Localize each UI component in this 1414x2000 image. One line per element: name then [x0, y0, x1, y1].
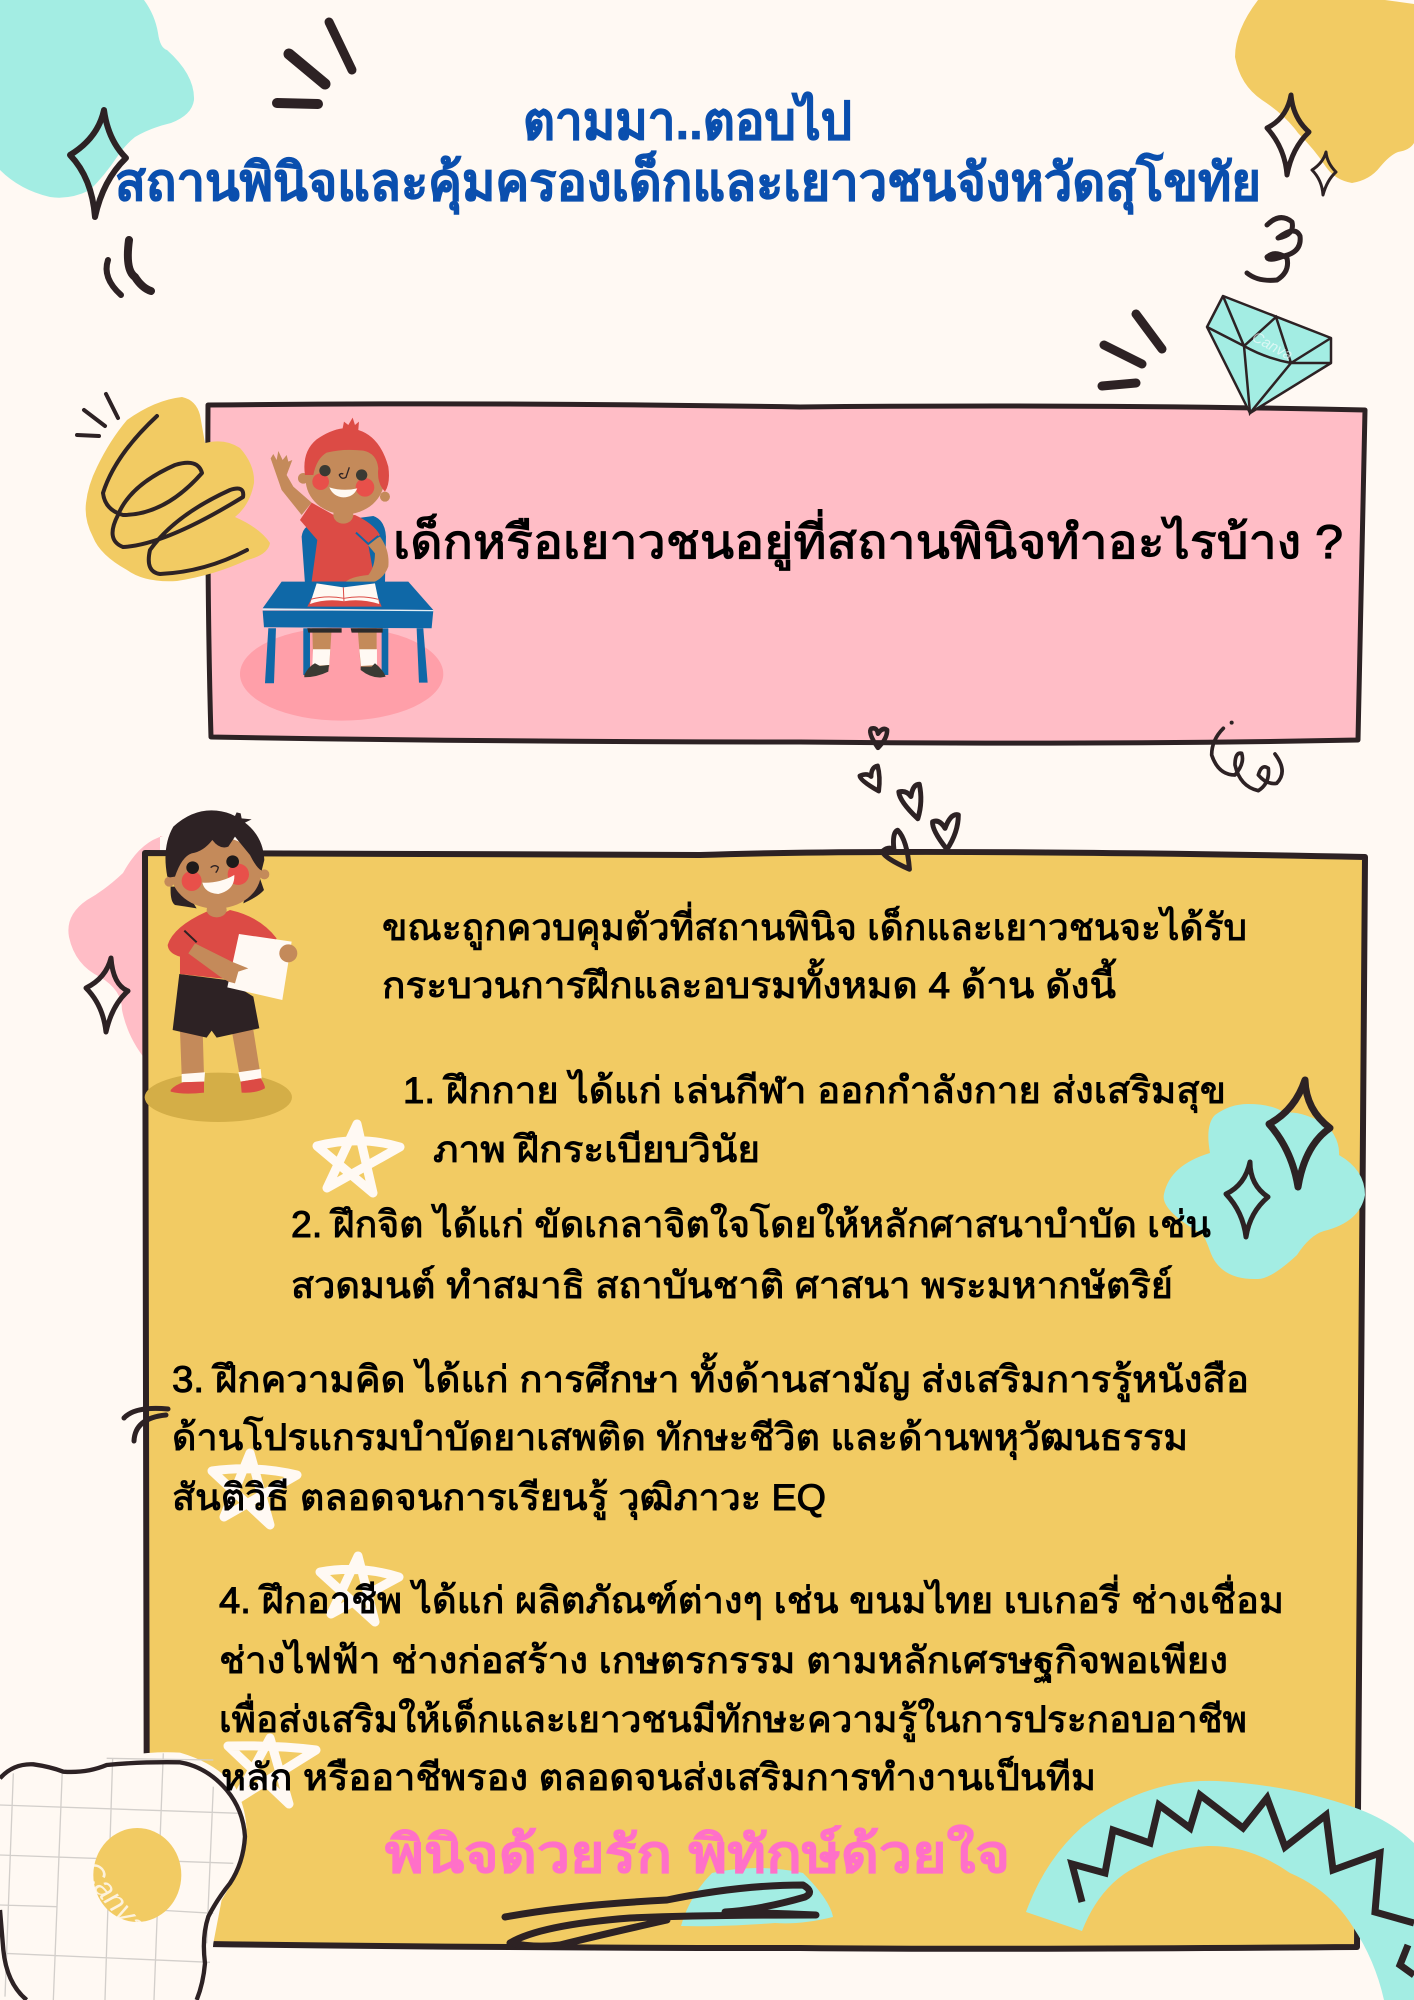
head	[298, 418, 390, 524]
head	[164, 810, 269, 917]
text block: item 3: สันติวิธี ตลอดจนการเรียนรู้ วุฒิภาวะ EQ	[172, 1477, 826, 1520]
text block: item 3: 3. ฝึกความคิด ได้แก่ การศึกษา ทั้งด้านสามัญ ส่งเสริมการรู้หนังสือ	[172, 1352, 1249, 1402]
decoration: double curved marks	[107, 240, 151, 295]
legs and shoes	[304, 628, 386, 677]
text block: item 4: 4. ฝึกอาชีพ ได้แก่ ผลิตภัณฑ์ต่างๆ เช่น ขนมไทย เบเกอรี่ ช่างเชื่อม	[219, 1574, 1284, 1621]
blob: small teal bottom centre	[681, 1868, 833, 1926]
yellow circle	[93, 1828, 181, 1922]
icon: diamond	[1207, 296, 1331, 413]
decoration: curly loop	[1212, 721, 1282, 791]
other arm	[345, 537, 389, 583]
raised arm	[271, 451, 312, 515]
text block: intro: ขณะถูกควบคุมตัวที่สถานพินิจ เด็กและเยาวชนจะได้รับ	[382, 901, 1247, 950]
panel: yellow details	[145, 852, 1365, 1949]
blob: yellow top right	[1235, 0, 1414, 183]
icon: white star 1	[317, 1124, 400, 1193]
panel: pink question	[208, 404, 1365, 743]
grid lines	[0, 1753, 240, 2000]
zigzag line	[1072, 1795, 1414, 1975]
icon: hearts cluster	[860, 728, 958, 869]
watermark: Canva	[73, 1855, 154, 1943]
desk	[263, 582, 433, 683]
icon: diamond: Canva	[1249, 329, 1295, 364]
blob: pink behind second boy	[68, 836, 163, 1065]
outline	[0, 1762, 245, 2000]
scribble: bottom centre	[505, 1885, 816, 1946]
text block: item 4: เพื่อส่งเสริมให้เด็กและเยาวชนมีทักษะความรู้ในการประกอบอาชีพ	[219, 1693, 1247, 1742]
text block: item 2: สวดมนต์ ทำสมาธิ สถาบันชาติ ศาสนา พระมหากษัตริย์	[291, 1265, 1173, 1306]
burst marks	[77, 394, 118, 436]
icon: sparkle in teal blob large	[1269, 1080, 1330, 1187]
icon: white star 2	[212, 1453, 297, 1525]
ground shadow	[145, 1073, 292, 1122]
decoration: curved marks left of item 3	[124, 1408, 168, 1441]
text block: item 1: ภาพ ฝึกระเบียบวินัย	[433, 1129, 760, 1170]
paper fill and glow	[0, 1752, 247, 2000]
heading: เด็กหรือเยาวชนอยู่ที่สถานพินิจทำอะไรบ้าง ?	[393, 509, 1343, 571]
icon: standing boy with paper	[145, 810, 297, 1122]
text block: intro	[382, 901, 1247, 1006]
shirt	[300, 503, 380, 582]
text block: item 1	[403, 1069, 1226, 1170]
text block: item 2	[291, 1203, 1211, 1306]
decoration: spiral top right	[1247, 218, 1300, 280]
text block: intro: กระบวนการฝึกและอบรมทั้งหมด 4 ด้าน ดังนี้	[382, 958, 1117, 1006]
icon: boy at desk raising hand	[240, 418, 443, 721]
text block: item 4: ช่างไฟฟ้า ช่างก่อสร้าง เกษตรกรรม ตามหลักเศรษฐกิจพอเพียง	[219, 1639, 1228, 1683]
text block: item 4	[219, 1574, 1284, 1798]
blob: teal right in panel	[1164, 1104, 1365, 1279]
text block: item 1: 1. ฝึกกาย ได้แก่ เล่นกีฬา ออกกำลังกาย ส่งเสริมสุข	[403, 1069, 1226, 1113]
shirt	[168, 910, 277, 980]
arm and hand	[188, 943, 297, 983]
icon: sparkle in teal blob small	[1226, 1162, 1268, 1237]
decoration: top burst marks	[277, 22, 352, 104]
icon: sparkle left	[70, 110, 126, 217]
text block: item 3: ด้านโปรแกรมบำบัดยาเสพติด ทักษะชีวิต และด้านพหุวัฒนธรรม	[172, 1416, 1188, 1460]
icon: sparkle on pink blob	[86, 958, 128, 1032]
legs	[171, 1030, 265, 1094]
icon: sparkle right small	[1312, 152, 1336, 195]
icon: white star 3	[320, 1556, 399, 1622]
decoration: burst marks beside diamond	[1102, 314, 1162, 386]
paper	[227, 934, 292, 1000]
text block: item 3	[172, 1352, 1249, 1520]
title line 1: ตามมา..ตอบไป	[523, 91, 852, 151]
title	[115, 91, 1261, 215]
text block: item 4: หลัก หรืออาชีพรอง ตลอดจนส่งเสริมการทำงานเป็นทีม	[221, 1754, 1096, 1798]
floor shadow	[240, 627, 443, 721]
note paper bottom left	[0, 1752, 247, 2000]
open book	[307, 583, 382, 607]
motto: พินิจด้วยรัก พิทักษ์ด้วยใจ	[385, 1824, 1010, 1884]
title line 2: สถานพินิจและคุ้มครองเด็กและเยาวชนจังหวัดสุโขทัย	[115, 151, 1261, 215]
icon: sparkle right large	[1267, 95, 1309, 175]
shorts	[173, 974, 259, 1038]
scribble line	[103, 416, 247, 574]
arch: teal bottom right	[1026, 1781, 1414, 2000]
icon: white star 4	[228, 1738, 316, 1804]
text block: item 2: 2. ฝึกจิต ได้แก่ ขัดเกลาจิตใจโดยให้หลักศาสนาบำบัด เช่น	[291, 1203, 1211, 1245]
blob: teal top left	[0, 0, 194, 198]
blob: yellow with scribble	[77, 394, 270, 581]
chair	[302, 516, 388, 675]
